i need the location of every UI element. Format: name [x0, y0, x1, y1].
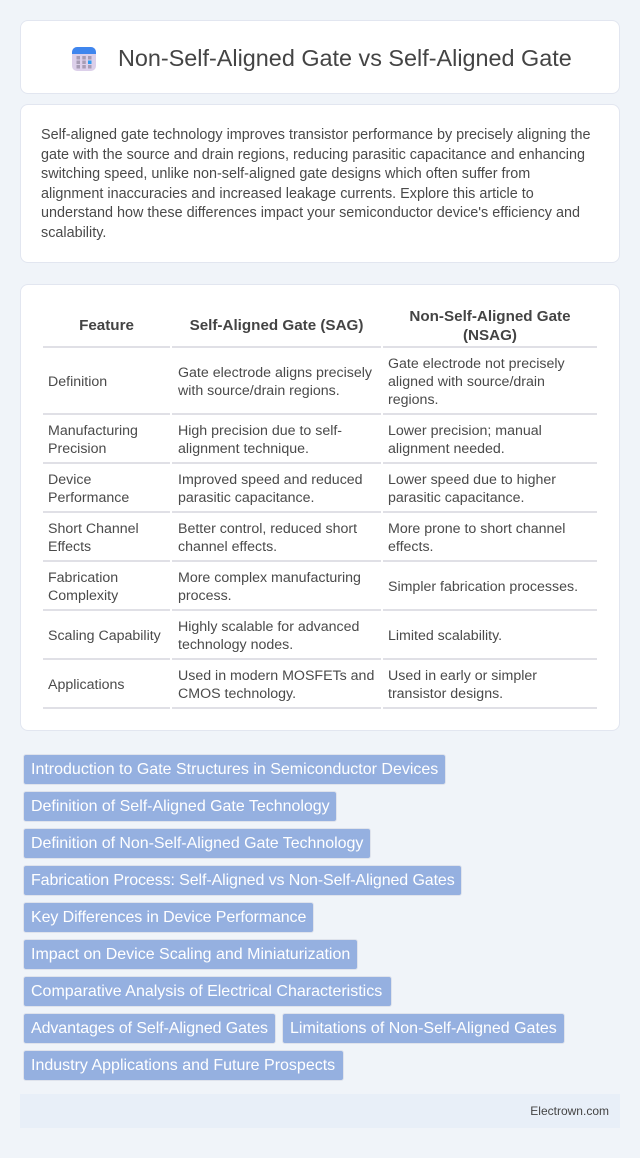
table: comparison: parasitic capacitance. — [388, 490, 524, 506]
text block: intro: understand how these differences impact your semiconductor device's efficiency and — [41, 205, 580, 221]
table: comparison: channel effects. — [178, 539, 277, 555]
table: comparison: Improved speed and reduced — [178, 472, 363, 488]
table: comparison: aligned with source/drain — [388, 374, 545, 390]
table: comparison: Highly scalable for advanced — [178, 619, 359, 635]
table: comparison: alignment technique. — [178, 441, 309, 457]
tag: Advantages of Self-Aligned Gates — [31, 1020, 268, 1037]
tag: Definition of Non-Self-Aligned Gate Technology — [31, 835, 363, 852]
text block: intro: switching speed, unlike non-self-aligned gate designs which often suffer from — [41, 166, 530, 182]
table: comparison: CMOS technology. — [178, 686, 296, 702]
table: comparison: More prone to short channel — [388, 521, 565, 537]
tag — [23, 1050, 344, 1081]
title: Non-Self-Aligned Gate vs Self-Aligned Gate — [118, 45, 572, 71]
tag: Definition of Self-Aligned Gate Technology — [31, 798, 330, 815]
row: fabrication complexity — [48, 570, 118, 604]
table: comparison: Used in modern MOSFETs and — [178, 668, 374, 684]
row: fabrication complexity: Fabrication — [48, 570, 118, 586]
table: comparison: Self-Aligned Gate (SAG) — [190, 317, 363, 334]
row: applications: Applications — [48, 677, 125, 693]
tag — [23, 865, 462, 896]
table: comparison: technology nodes. — [178, 637, 293, 653]
icon: calendar — [72, 47, 96, 71]
footer — [20, 1094, 620, 1128]
footer text: Electrown.com — [530, 1104, 609, 1118]
table: comparison: with source/drain regions. — [178, 383, 340, 399]
row: fabrication complexity: Complexity — [48, 588, 118, 604]
tag: Limitations of Non-Self-Aligned Gates — [290, 1020, 557, 1037]
table: comparison — [43, 308, 597, 709]
table: comparison: Gate electrode not precisely — [388, 356, 565, 372]
row: device performance: Performance — [48, 490, 129, 506]
row: manufacturing precision — [48, 423, 138, 457]
table: comparison: More complex manufacturing — [178, 570, 361, 586]
table: comparison: parasitic capacitance. — [178, 490, 314, 506]
table: comparison: Used in early or simpler — [388, 668, 537, 684]
table: comparison: Limited scalability. — [388, 628, 502, 644]
tag — [23, 976, 392, 1007]
table: comparison: process. — [178, 588, 232, 604]
table: comparison: Gate electrode aligns precisely — [178, 365, 372, 381]
tag — [282, 1013, 565, 1044]
tag — [23, 902, 314, 933]
row: device performance — [48, 472, 129, 506]
text block: intro: alignment inaccuracies and increased leakage currents. Explore this article to — [41, 186, 534, 202]
table: comparison: Lower speed due to higher — [388, 472, 556, 488]
table: comparison: alignment needed. — [388, 441, 505, 457]
tag: Industry Applications and Future Prospects — [31, 1057, 335, 1074]
text block: intro — [41, 127, 591, 240]
tag — [23, 1013, 276, 1044]
tag — [23, 791, 337, 822]
panel: comparison table — [20, 284, 620, 731]
table: comparison: effects. — [388, 539, 433, 555]
table: comparison: High precision due to self- — [178, 423, 342, 439]
row: device performance: Device — [48, 472, 91, 488]
row: definition: Definition — [48, 374, 107, 390]
row: short channel effects — [48, 521, 139, 555]
table: comparison: Non-Self-Aligned Gate — [409, 308, 571, 325]
tag: Comparative Analysis of Electrical Characteristics — [31, 983, 382, 1000]
row: manufacturing precision: Manufacturing — [48, 423, 138, 439]
tag — [23, 939, 358, 970]
tag — [23, 828, 371, 859]
table: comparison: Simpler fabrication processes. — [388, 579, 578, 595]
tag — [23, 754, 446, 785]
row: manufacturing precision: Precision — [48, 441, 106, 457]
panel: introduction — [20, 104, 620, 263]
row: short channel effects: Short Channel — [48, 521, 139, 537]
tag: Key Differences in Device Performance — [31, 909, 306, 926]
table: comparison: transistor designs. — [388, 686, 503, 702]
tag: Fabrication Process: Self-Aligned vs Non-Self-Aligned Gates — [31, 872, 455, 889]
text block: intro: Self-aligned gate technology improves transistor performance by precisely aligning the — [41, 127, 591, 143]
panel: header — [20, 20, 620, 94]
text block: intro: scalability. — [41, 224, 106, 240]
table: comparison: regions. — [388, 392, 438, 408]
table: comparison: Lower precision; manual — [388, 423, 542, 439]
table: comparison: (NSAG) — [463, 327, 517, 344]
tag: Impact on Device Scaling and Miniaturization — [31, 946, 350, 963]
text block: intro: gate with the source and drain regions, reducing parasitic capacitance and enhancing — [41, 146, 585, 162]
tag: Introduction to Gate Structures in Semiconductor Devices — [31, 761, 438, 778]
row: short channel effects: Effects — [48, 539, 91, 555]
table header: Feature — [79, 317, 134, 334]
table: comparison: Better control, reduced short — [178, 521, 357, 537]
row: scaling capability: Scaling Capability — [48, 628, 161, 644]
